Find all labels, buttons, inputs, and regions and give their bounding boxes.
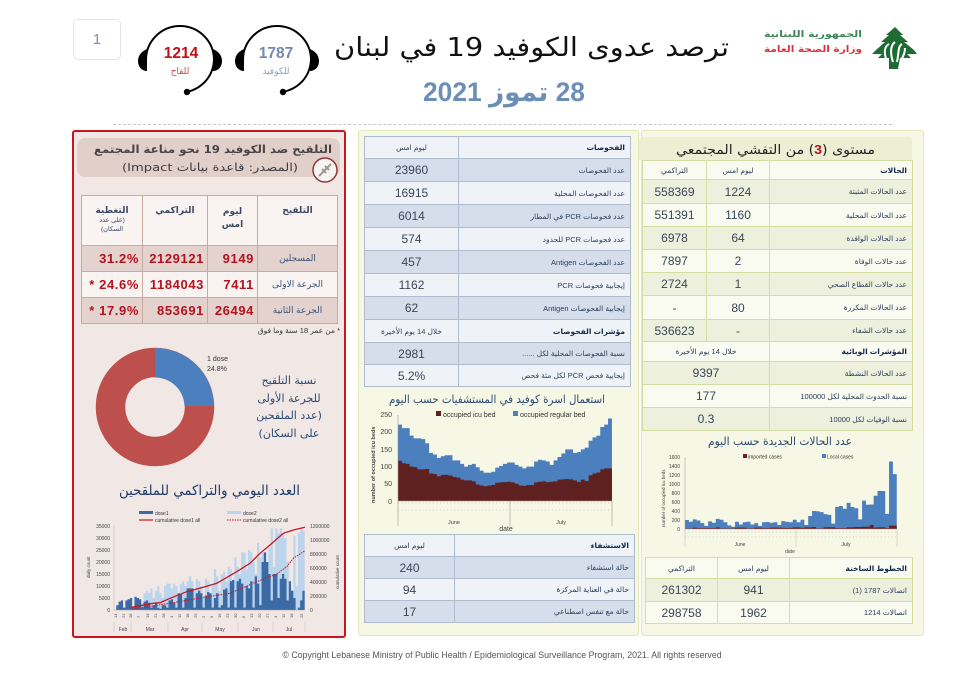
stacked area chart: hospital beds [371,411,612,533]
vaccination table: 26494 [215,303,254,318]
cases table: عدد الحالات النشطة [845,368,907,378]
legend: occupied icu bed [443,412,496,419]
first dose coverage caption [256,374,322,440]
regular beds area [398,418,612,501]
hotlines table [645,557,913,624]
tests table: 6014 [398,209,425,223]
cases table: 551391 [654,208,695,222]
recovery table: حالة مع تنفس اصطناعي [554,607,629,616]
imported cases bars [685,525,897,529]
vaccination table: التلقيح [282,205,313,215]
legend: imported cases [748,454,782,460]
axes: July [842,542,851,548]
axes: 35000 [96,524,110,530]
cases table: الحالات [880,166,907,174]
vaccination table: (على عدد [99,217,125,224]
axes: 800000 [310,552,327,558]
axes: 6 [241,615,246,618]
ministry name: وزارة الصحة العامة [764,45,862,55]
tests table: 16915 [395,186,428,200]
axes: 150 [380,447,392,454]
hotlines table: 1962 [740,606,767,620]
legend [139,511,288,524]
tests table: 1162 [399,278,424,292]
cases table: ليوم امس [723,166,753,174]
cases table: 558369 [654,184,695,198]
vaccination table: التراكمي [155,205,195,215]
vaccination table: السكان) [101,226,123,233]
hotlines table: اتصالات 1787 (1) [853,586,907,594]
axes: 25 [299,613,304,618]
tests table [364,136,631,387]
tests table: ليوم امس [396,143,427,152]
cases table: 1224 [725,184,751,198]
new cases chart title: عدد الحالات الجديدة حسب اليوم [708,434,852,449]
axes: 0 [677,527,680,533]
legend [436,411,585,419]
axes [661,455,897,555]
axes: 28 [161,613,166,618]
tests table: إيجابية الفحوصات Antigen [543,304,625,312]
axes: 25000 [96,548,110,554]
dose 2 bars [114,528,305,610]
hotlines table: 941 [743,583,764,597]
cases table: عدد حالات الشفاء [852,326,907,335]
axes: 23 [225,613,230,618]
axes: 1200000 [310,524,330,530]
recovery table [364,534,635,623]
cases table: - [672,300,676,314]
local cases bars [685,462,897,529]
donut chart: first dose coverage [96,348,228,466]
heading text [94,143,332,174]
cases table: التراكمي [661,166,688,174]
axes: 16 [217,613,222,618]
axes: 1000000 [310,538,330,544]
stacked bar chart: new cases [661,454,898,555]
axes: June [448,520,460,526]
decorative dashed rule [113,124,892,125]
axes: 10000 [96,584,110,590]
axes: Jun [252,627,260,633]
tests table: نسبة الفحوصات المحلية لكل ...... [522,349,625,358]
axes: 28 [128,613,133,618]
tests table: إيجابية فحص PCR لكل مئة فحص [521,371,625,380]
heading text: التلقيح ضد الكوفيد 19 نحو مناعة المجتمع [94,143,332,156]
cases table: عدد الحالات الوافدة [846,234,907,242]
tests table: عدد فحوصات PCR في المطار [530,212,625,220]
axes: 18 [289,613,294,618]
vaccination table: 7411 [223,277,254,292]
recovery table: 17 [403,604,416,618]
dose 1 bars [114,552,305,610]
axes: 13 [249,613,254,618]
vaccination table: * 17.9% [89,303,139,318]
axes: 100 [380,464,392,471]
cases table: عدد الحالات المثبتة [849,187,907,196]
cases table: 0.3 [698,412,714,426]
hotlines table: الخطوط الساخنة [845,564,907,572]
tests table: مؤشرات الفحوصات [553,326,625,336]
hotline 1214 headset: للقاح [171,67,189,77]
date heading: 28 تموز 2021 [423,77,585,108]
cases table: 1160 [725,208,751,222]
ministry name [764,30,862,55]
page number box: 1 [93,31,101,48]
axes: date [785,549,795,555]
legend: Local cases [827,454,854,460]
tests table: عدد فحوصات PCR للحدود [543,234,625,244]
axes: 25 [193,613,198,618]
hotline 1787 headset: 1787 [259,45,293,62]
heading text: مستوى (3) من التفشي المجتمعي [676,142,875,158]
axes [86,524,340,633]
axes: 14 [145,613,150,618]
axes: 11 [281,613,286,618]
cases table: 536623 [654,324,695,338]
axes: 20000 [96,560,110,566]
axes: Feb [119,627,128,633]
axes: 1200 [669,473,680,479]
axes: 400000 [310,580,327,586]
copyright footer: © Copyright Lebanese Ministry of Public Health / Epidemiological Surveillance Program, 2021. All rights reserved [282,650,722,660]
axes: 7 [136,615,141,618]
page number box [73,19,121,60]
axes: 4 [273,615,278,618]
donut segment: 1 dose [155,348,214,406]
cases table: 7897 [661,254,688,268]
axes: cumulative count [335,554,340,589]
axes: 0 [107,608,110,614]
hotline 1214 headset [138,25,222,96]
vaccination table: * 24.6% [89,277,139,292]
cases table: 2 [735,254,741,268]
axes: number of occupied icu beds [661,469,666,527]
legend [743,454,854,460]
axes: 50 [384,481,392,488]
axes: 18 [185,613,190,618]
icon: cedar tree [872,27,917,69]
axes: 1600 [669,455,680,461]
axes: 21 [121,613,126,618]
cumulative dose 2 line [132,551,305,609]
vaccination table: المسجلين [279,253,316,263]
tests table: 5.2% [398,368,425,382]
vaccination table: 2129121 [149,251,204,266]
vaccination table [81,195,338,324]
hotline 1787 headset [235,25,319,96]
legend: cumulative dose2 all [243,518,288,524]
axes: date [499,526,513,533]
ministry logo [764,27,917,69]
cases table: عدد الحالات المكررة [844,303,907,312]
recovery table: ليوم امس [394,541,425,550]
cases table: خلال 14 يوم الأخيرة [675,347,737,356]
community spread heading [639,137,912,160]
cases table [642,160,913,431]
axes: daily count [86,556,91,578]
legend: dose1 [155,511,169,517]
vaccination table: امس [222,219,243,229]
cumulative dose 1 line [132,527,305,607]
axes: 5000 [99,596,110,602]
cases table: عدد حالات القطاع الصحي [828,280,907,288]
axes: 600 [672,500,680,506]
vaccination table: الجرعة الاولى [272,279,323,289]
hotlines table: ليوم امس [738,564,769,572]
first dose coverage caption: للجرعة الأولى [257,392,321,404]
main title: ترصد عدوى الكوفيد 19 في لبنان [334,33,729,63]
cases table: 9397 [693,366,719,380]
axes: 0 [310,608,313,614]
tests table: عدد الفحوصات المحلية [554,188,625,198]
axes: 0 [388,499,392,506]
cases table: نسبة الوفيات لكل 10000 [829,414,907,424]
hotlines table: 298758 [661,606,702,620]
first dose coverage caption: على السكان) [259,426,319,440]
axes: 4 [169,615,174,618]
cases table: 1 [735,277,741,291]
hotline 1214 headset: 1214 [164,45,199,62]
panel: cases [641,130,924,636]
tests table: 62 [405,301,418,315]
cases table: المؤشرات الوبائية [842,347,907,356]
cases table: 80 [731,300,745,314]
cases table: 6978 [661,231,688,245]
recovery table: الاستشفاء [591,541,629,550]
recovery table: حالة في العناية المركزة [557,585,629,594]
combo chart: vaccinations [86,511,340,633]
legend: dose2 [243,511,257,517]
icon: vaccine syringe [312,157,338,183]
cases table: 2724 [661,277,688,291]
axes: 11 [177,613,182,618]
heading text: (المصدر: قاعدة بيانات Impact) [122,161,298,174]
tests table: خلال 14 يوم الأخيرة [381,326,442,336]
vaccination table: 853691 [157,303,204,318]
axes: 200000 [310,594,327,600]
recovery table: حالة استشفاء [587,563,629,572]
vaccination table: 9149 [223,251,254,266]
axes: June [735,542,746,548]
axes: 600000 [310,566,327,572]
recovery table: 240 [399,560,420,574]
vaccination table: الجرعة الثانية [273,305,322,315]
legend: occupied regular bed [520,412,585,419]
axes: 14 [113,613,118,618]
cases table: عدد الحالات المحلية [846,210,907,220]
tests table: 574 [401,232,422,246]
donut label: 1 dose [207,356,228,363]
axes: 400 [672,509,680,515]
axes: 20 [257,613,262,618]
tests table: عدد الفحوصات [579,166,625,174]
tests table: 457 [401,255,422,269]
cases table: نسبة الحدوث المحلية لكل 100000 [800,392,907,400]
axes: 1400 [669,464,680,470]
axes: 15000 [96,572,110,578]
ICU beds area [398,461,612,501]
ministry name: الجمهورية اللبنانية [764,30,862,40]
axes: 800 [672,491,680,497]
vaccination table: ليوم [223,206,242,216]
axes: 30000 [96,536,110,542]
hotlines table: اتصالات 1214 [864,608,907,617]
axes: 200 [380,429,392,436]
hotlines table: التراكمي [668,564,695,572]
cases table: 177 [696,389,716,403]
axes: 2 [201,615,206,618]
legend: cumulative dose1 all [155,518,200,524]
axes [371,412,612,533]
cases table: عدد حالات الوفاة [855,256,907,266]
axes: number of occupied icu beds [371,427,377,503]
vaccination heading [77,138,340,177]
tests table: الفحوصات [586,143,625,152]
axes: Jul [286,627,292,633]
first dose coverage caption: نسبة التلقيح [262,374,316,387]
axes: May [215,627,225,633]
axes: Mar [146,627,155,633]
axes: 9 [209,615,214,618]
axes: 1000 [669,482,680,488]
vaccination footnote: * من عمر 18 سنة وما فوق [258,326,340,335]
hotlines table: 261302 [661,583,702,597]
tests table: 23960 [395,163,428,177]
tests table: إيجابية فحوصات PCR [557,280,625,290]
recovery table: 94 [403,582,416,596]
daily and cumulative chart title: العدد اليومي والتراكمي للملقحين [119,483,300,499]
axes: Apr [181,627,189,633]
vaccination table: 1184043 [150,277,204,292]
axes: 30 [233,613,238,618]
first dose coverage caption: (عدد الملقحين [256,409,322,422]
vaccination table: التغطية [95,205,129,215]
axes: 27 [265,613,270,618]
axes: 250 [380,412,392,419]
tests table: عدد الفحوصات Antigen [551,258,625,266]
vaccination table: 31.2% [99,251,139,266]
panel: tests and hospital beds [358,130,639,636]
axes: July [556,520,566,526]
axes: 21 [153,613,158,618]
cases table: - [736,324,740,338]
hotline 1787 headset: للكوفيد [262,67,290,77]
donut chart: first dose coverage: 24.8% [207,366,227,373]
tests table: 2981 [398,346,425,360]
cases table: 64 [731,231,745,245]
axes: 200 [672,518,680,524]
panel: vaccination [72,130,346,638]
